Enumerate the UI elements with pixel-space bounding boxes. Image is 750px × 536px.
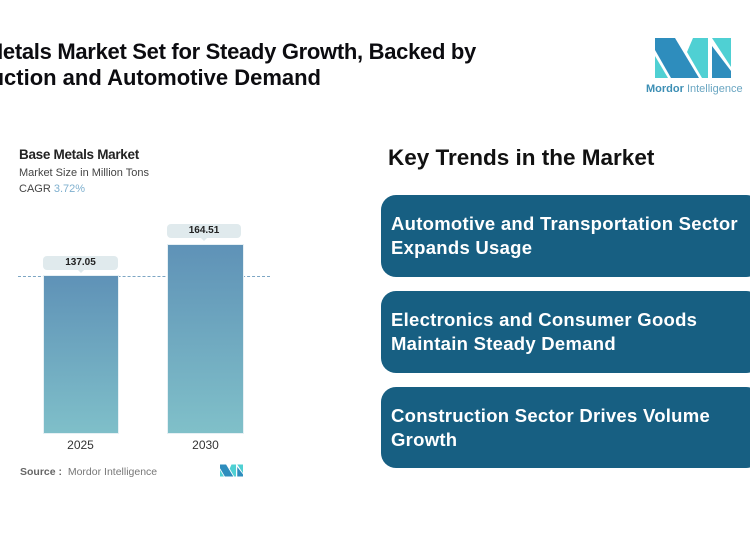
card: automotive <box>381 195 750 277</box>
card: construction: Construction Sector Drives Volume <box>391 405 710 426</box>
card: construction: Growth <box>391 429 457 450</box>
card: electronics: Electronics and Consumer Goods <box>391 309 697 330</box>
CAGR: CAGR 3.72% <box>19 183 85 195</box>
chart panel: Base Metals Market <box>18 147 270 478</box>
logo: Mordor Intelligence <box>646 38 743 95</box>
heading: Key Trends: Key Trends in the Market <box>388 145 654 170</box>
title <box>0 39 476 90</box>
card: electronics: Maintain Steady Demand <box>391 333 616 354</box>
card: electronics <box>381 291 750 373</box>
card: automotive: Automotive and Transportation Sector <box>391 213 738 234</box>
bar: 2025 <box>44 276 118 433</box>
value label: 164.51 <box>167 224 241 238</box>
card: construction <box>381 387 750 468</box>
x label: 2025: 2025 <box>67 438 94 452</box>
x label: 2030: 2030 <box>192 438 219 452</box>
logo: Mordor Intelligence: Mordor Intelligence <box>646 83 743 95</box>
dashed reference line <box>18 276 270 277</box>
source: Source : Mordor Intelligence <box>20 466 157 478</box>
chart subtitle: Market Size in Million Tons <box>19 167 149 179</box>
value label: 164.51: 164.51 <box>189 225 219 236</box>
chart title: Base Metals Market <box>19 147 139 162</box>
value label: 137.05: 137.05 <box>65 257 96 268</box>
value label: 137.05 <box>43 256 118 270</box>
icon: small logo <box>220 464 243 476</box>
card: automotive: Expands Usage <box>391 237 532 258</box>
bar: 2030 <box>168 245 243 433</box>
